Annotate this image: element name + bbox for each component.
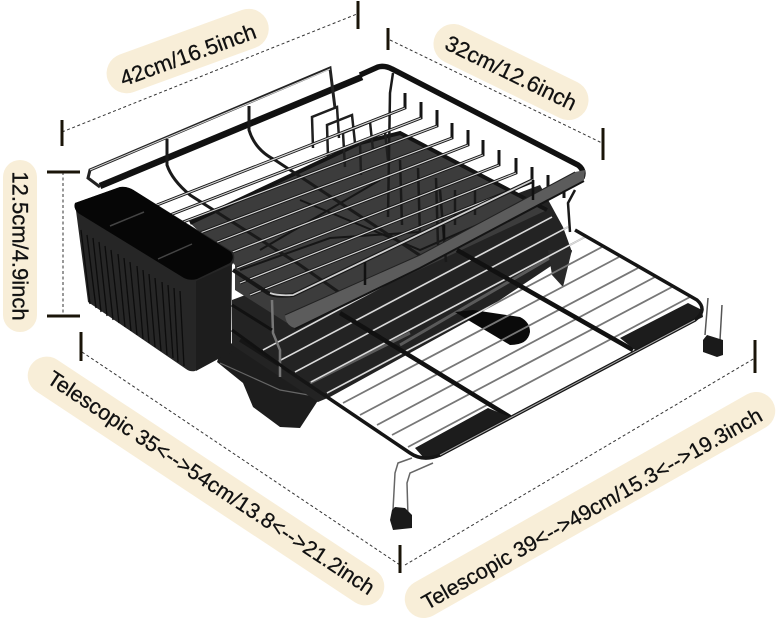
spout notch: [455, 310, 530, 345]
right leg: [705, 298, 722, 340]
drip tray base: [217, 340, 330, 428]
rack rim right: [360, 66, 583, 178]
drawer front strips: [415, 408, 510, 457]
dimension: rack width: [62, 1, 358, 146]
drawer cross bars: [340, 250, 633, 417]
back bar: [100, 77, 362, 186]
drawer wires: [263, 205, 690, 447]
drawer rim: [240, 230, 702, 458]
dimension: rack depth: 32cm/12.6inch: [441, 30, 581, 116]
dimension: rack width: 42cm/16.5inch: [116, 19, 260, 91]
upper tray: [190, 133, 547, 328]
hook: [272, 300, 280, 377]
pegs: [312, 107, 388, 175]
back high wire: [88, 68, 335, 187]
dimension: height: 12.5cm/4.9inch: [8, 171, 32, 321]
dimension: height: [3, 160, 80, 332]
rack front top wire: [233, 180, 533, 296]
dimension: telescopic width: Telescopic 39<-->49cm/15.3<-->19.3inch: [418, 403, 766, 615]
rack front band: [285, 170, 585, 328]
dimension: telescopic width: [398, 340, 780, 621]
rack wires: [157, 93, 564, 295]
dark area under rack: [232, 185, 572, 402]
left leg: [393, 458, 433, 517]
tray foot: [548, 250, 572, 287]
dimension: rack depth: [388, 17, 603, 160]
utensil caddy: [74, 187, 234, 371]
dimension: telescopic length: Telescopic 35<-->54cm/13.8<-->21.2inch: [43, 366, 379, 600]
dish rack illustration: [74, 66, 723, 530]
back supports: [167, 106, 430, 300]
